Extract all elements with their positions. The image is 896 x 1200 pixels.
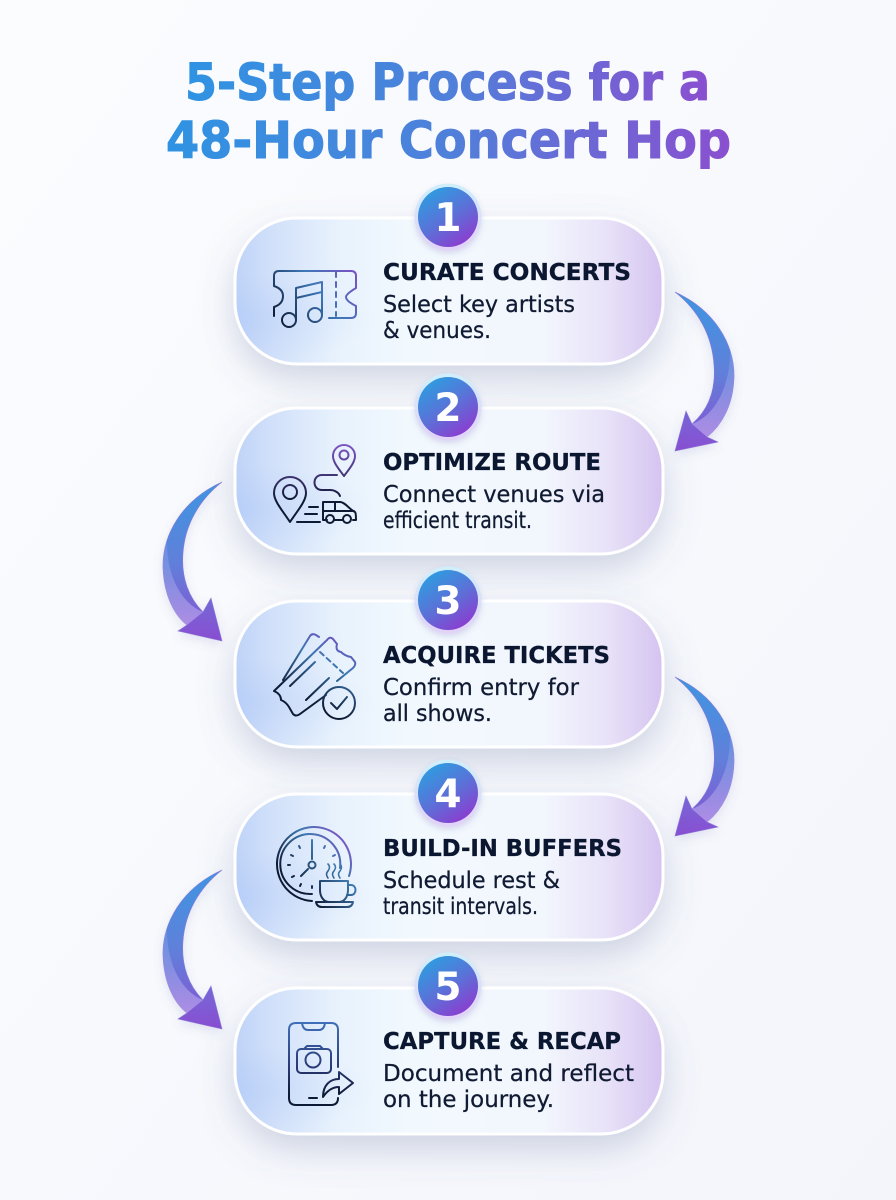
text: optimize route (383, 448, 605, 534)
arrow: step 2 to 3 (163, 482, 222, 641)
panel: step 1 curate concerts (235, 218, 663, 364)
badge: 4: 4 (434, 772, 462, 817)
icon: ticket with music note (274, 271, 356, 327)
title: 5-Step Process for a (185, 54, 710, 113)
title: 48-Hour Concert Hop (166, 112, 731, 171)
panel: step 4 build-in buffers (235, 794, 663, 940)
badge: 1: 1 (434, 196, 462, 241)
icon: clock and coffee cup (277, 827, 356, 907)
text: build-in buffers (383, 834, 622, 920)
text: build-in buffers: transit intervals. (383, 894, 538, 920)
text: optimize route: Connect venues via (383, 482, 605, 508)
arrow: step 3 to 4 (675, 677, 734, 836)
badge: 2: 2 (434, 386, 462, 431)
text: optimize route: efficient transit. (383, 508, 532, 534)
panel: step 3 acquire tickets (235, 601, 663, 747)
text: capture and recap (383, 1027, 634, 1113)
badge: 5 (414, 952, 482, 1020)
text: curate concerts (383, 258, 631, 344)
text: curate concerts: Select key artists (383, 292, 575, 318)
text: curate concerts: & venues. (383, 318, 491, 344)
arrow: step 4 to 5 (163, 870, 222, 1029)
icon: route with pins and van (274, 445, 356, 523)
panel: step 5 capture and recap (235, 988, 663, 1134)
badge: 3 (414, 566, 482, 634)
text: optimize route: OPTIMIZE ROUTE (383, 448, 601, 476)
text: build-in buffers: BUILD-IN BUFFERS (383, 834, 622, 862)
badge: 2 (414, 374, 482, 440)
badge: 1 (414, 184, 482, 250)
text: curate concerts: CURATE CONCERTS (383, 258, 631, 286)
text: capture and recap: on the journey. (383, 1087, 554, 1113)
text: capture and recap: Document and reflect (383, 1061, 634, 1087)
icon: tickets with check (274, 634, 355, 719)
text: acquire tickets: Confirm entry for (383, 675, 580, 701)
icon: phone with camera and share arrow (289, 1023, 353, 1105)
title (166, 54, 731, 171)
badge: 5: 5 (434, 965, 462, 1010)
text: capture and recap: CAPTURE & RECAP (383, 1027, 621, 1055)
arrow: step 1 to 2 (675, 292, 734, 451)
text: build-in buffers: Schedule rest & (383, 868, 560, 894)
text: acquire tickets (383, 641, 610, 727)
text: acquire tickets: ACQUIRE TICKETS (383, 641, 610, 669)
panel: step 2 optimize route (235, 408, 663, 554)
text: acquire tickets: all shows. (383, 701, 492, 727)
badge: 3: 3 (434, 579, 462, 624)
badge: 4 (414, 760, 482, 826)
